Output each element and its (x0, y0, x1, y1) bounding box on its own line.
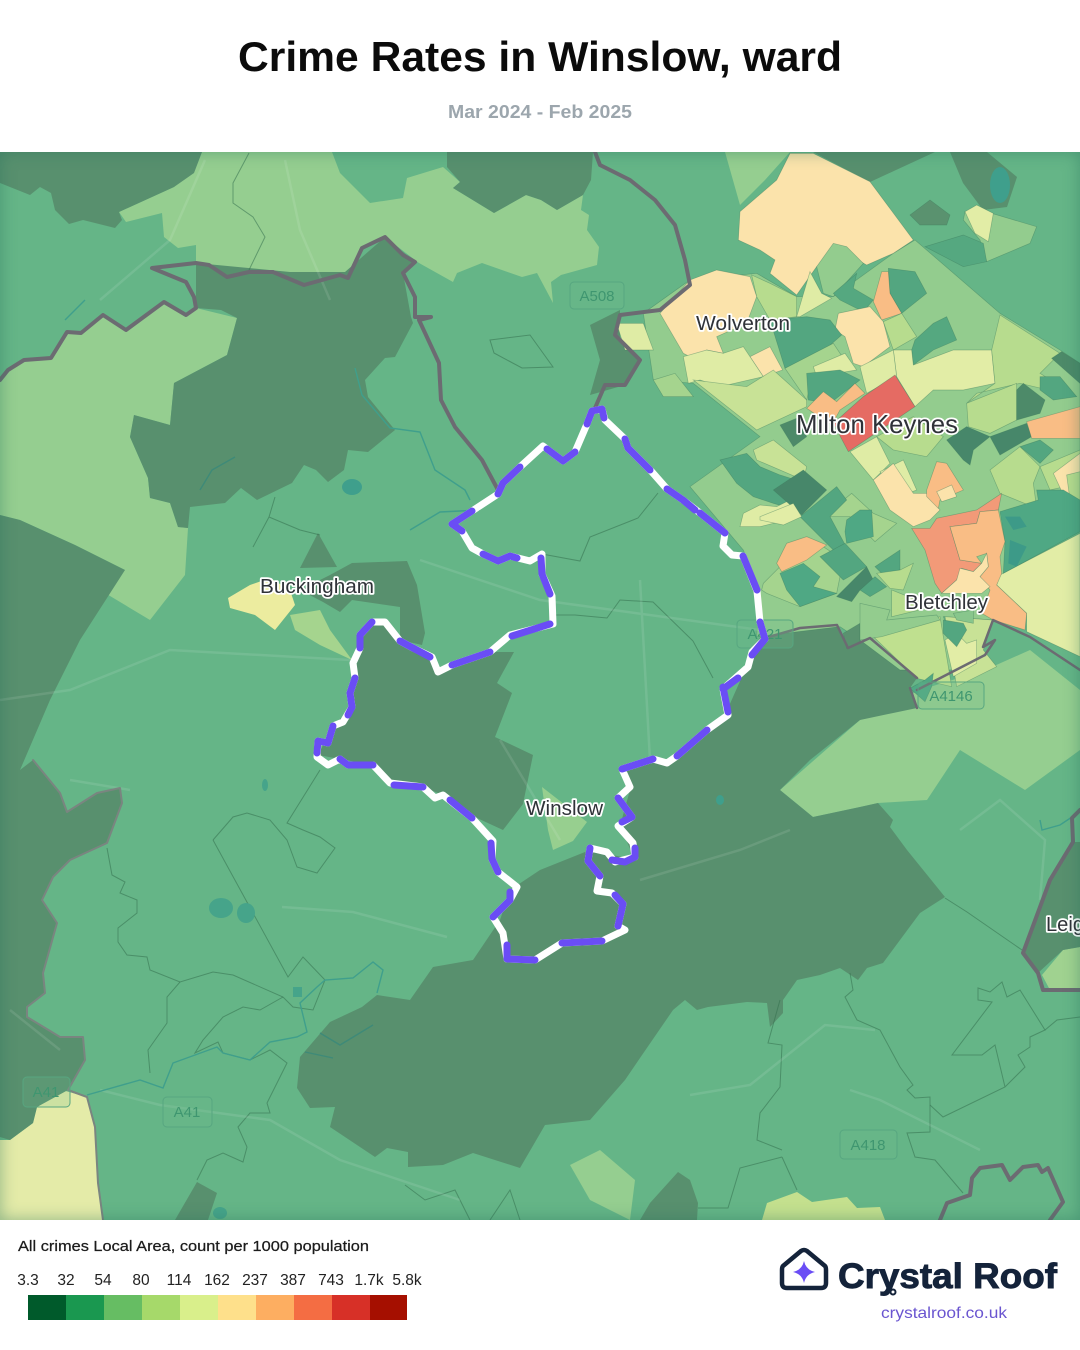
map: thin ward boundaries (107, 153, 1080, 1220)
map: place labels: Wolverton (696, 313, 790, 335)
legend tick labels: 237 (242, 1272, 268, 1289)
legend title: All crimes Local Area, count per 1000 population (18, 1238, 369, 1255)
map: road shields: A4146 (929, 688, 973, 705)
map panel (0, 152, 1080, 1220)
map: dark low-crime areas (0, 152, 1080, 1220)
legend tick labels: 387 (280, 1272, 306, 1289)
map: county boundaries (0, 152, 1080, 1220)
map: place labels: Buckingham (260, 576, 374, 598)
legend tick labels: 743 (318, 1272, 344, 1289)
map: road shields: A421 (747, 626, 783, 643)
map: Milton Keynes ward cells (617, 153, 1080, 702)
logo: Crystal Roof (782, 1250, 1057, 1322)
map: road shields: A41 (33, 1084, 59, 1101)
map: road shields (23, 282, 984, 1159)
map: rivers and lakes (65, 167, 1075, 1219)
subtitle: date range: Mar 2024 - Feb 2025 (448, 102, 632, 122)
map: place labels: Bletchley (905, 592, 988, 614)
legend tick labels: 5.8k (392, 1272, 422, 1289)
legend tick labels (17, 1272, 422, 1289)
map: place labels: Milton Keynes (796, 409, 958, 439)
legend tick labels: 162 (204, 1272, 230, 1289)
map: light green rural areas (0, 152, 1080, 1220)
legend colour scale (28, 1295, 407, 1320)
map: road shields: A41 (174, 1104, 200, 1121)
map: Bletchley cell group (760, 462, 1080, 702)
Winslow ward outline: white base line (317, 409, 765, 960)
legend (17, 1238, 422, 1320)
map: road shields: A508 (579, 288, 615, 305)
logo key ring detail (890, 1290, 896, 1294)
map: place labels (260, 313, 1080, 936)
legend tick labels: 80 (132, 1272, 150, 1289)
Winslow ward outline: purple dashes (317, 409, 765, 960)
map edge vignette (0, 152, 1080, 1220)
legend tick labels: 114 (167, 1272, 192, 1289)
map: place labels: Winslow (526, 798, 604, 820)
legend tick labels: 54 (94, 1272, 112, 1289)
map: road shields: A418 (850, 1137, 886, 1154)
map: faint roads (0, 160, 1045, 1200)
title: Crime Rates in Winslow, ward (238, 33, 842, 80)
legend tick labels: 1.7k (354, 1272, 384, 1289)
website url: crystalroof.co.uk (881, 1305, 1008, 1322)
legend tick labels: 32 (57, 1272, 75, 1289)
legend tick labels: 3.3 (17, 1272, 39, 1289)
logo wordmark: Crystal Roof (838, 1257, 1057, 1296)
icon: house with star (782, 1250, 826, 1288)
